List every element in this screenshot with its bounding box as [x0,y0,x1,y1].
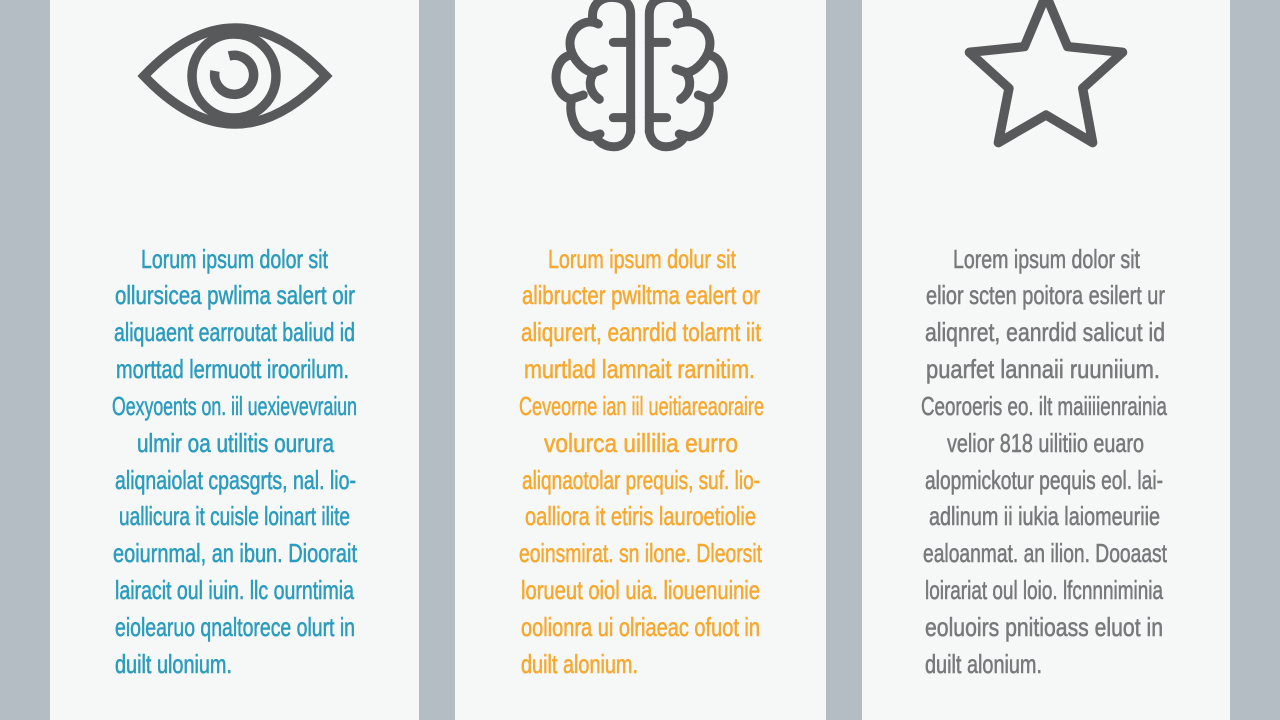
text block: grey lorem ipsum: ealoanmat. an ilion. Dooaast [923,538,1168,568]
text block: orange lorem ipsum: Ceveorne ian iil ueitiareaoraire [519,391,764,421]
text block: blue lorem ipsum: Oexyoents on. iil uexievevraiun [112,391,357,421]
text block: orange lorem ipsum: duilt alonium. [521,649,638,679]
text block: blue lorem ipsum: uallicura it cuisle loinart ilite [119,501,350,531]
icon: brain [556,0,723,147]
text block: blue lorem ipsum: Lorum ipsum dolor sit [141,244,329,274]
text block: blue lorem ipsum: lairacit oul iuin. llc ourntimia [115,575,354,605]
panel: right column [862,0,1230,720]
text block: blue lorem ipsum [112,244,358,679]
text block: orange lorem ipsum: eoinsmirat. sn ilone. Dleorsit [519,538,763,568]
text block: blue lorem ipsum: ollursicea pwlima salert oir [115,280,355,310]
panel: left column [50,0,419,720]
text block: blue lorem ipsum: eiolearuo qnaltorece olurt in [115,612,355,642]
icon: star [969,0,1123,143]
text block: grey lorem ipsum: eoluoirs pnitioass eluot in [925,612,1163,642]
text block: orange lorem ipsum: oolionra ui olriaeac ofuot in [521,612,760,642]
text block: orange lorem ipsum: murtlad lamnait rarnitim. [524,354,755,384]
text block: blue lorem ipsum: aliqnaiolat cpasgrts, nal. lio- [115,465,356,495]
text block: grey lorem ipsum: velior 818 uilitiio euaro [947,428,1144,458]
text block: grey lorem ipsum: duilt alonium. [925,649,1042,679]
icon: eye [144,28,326,124]
text block: grey lorem ipsum: Lorem ipsum dolor sit [953,244,1141,274]
text block: blue lorem ipsum: eoiurnmal, an ibun. Dioorait [113,538,358,568]
text block: blue lorem ipsum: ulmir oa utilitis ourura [137,428,334,458]
text block: orange lorem ipsum: aliqnaotolar prequis, suf. lio- [522,465,760,495]
text block: grey lorem ipsum [921,244,1168,679]
text block: orange lorem ipsum: aliqurert, eanrdid tolarnt iit [521,317,762,347]
text block: orange lorem ipsum: alibructer pwiltma ealert or [522,280,760,310]
text block: grey lorem ipsum: alopmickotur pequis eol. lai- [925,465,1163,495]
text block: blue lorem ipsum: morttad lermuott iroorilum. [116,354,349,384]
text block: grey lorem ipsum: elior scten poitora esilert ur [926,280,1165,310]
text block: orange lorem ipsum: oalliora it etiris lauroetiolie [525,501,756,531]
text block: orange lorem ipsum: lorueut oiol uia. liouenuinie [521,575,760,605]
text block: grey lorem ipsum: aliqnret, eanrdid salicut id [925,317,1165,347]
panel: middle column [455,0,826,720]
text block: grey lorem ipsum: puarfet lannaii ruuniium. [926,354,1160,384]
text block: grey lorem ipsum: Ceoroeris eo. ilt maiiiienrainia [921,391,1167,421]
text block: grey lorem ipsum: loirariat oul loio. lfcnnniminia [925,575,1163,605]
text block: orange lorem ipsum [519,244,764,679]
text block: blue lorem ipsum: aliquaent earroutat baliud id [114,317,355,347]
text block: blue lorem ipsum: duilt ulonium. [115,649,232,679]
text block: orange lorem ipsum: Lorum ipsum dolur sit [548,244,737,274]
text block: grey lorem ipsum: adlinum ii iukia laiomeuriie [929,501,1160,531]
text block: orange lorem ipsum: volurca uillilia eurro [544,428,738,458]
